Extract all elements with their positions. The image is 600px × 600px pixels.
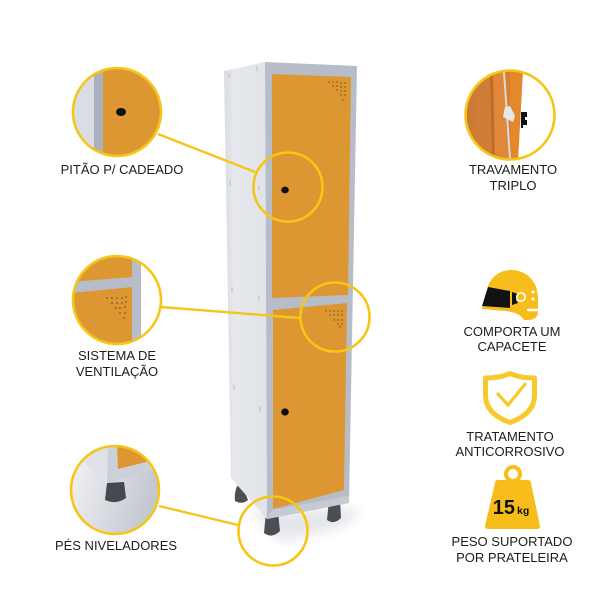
detail circle [465, 70, 555, 160]
detail circle [70, 445, 160, 535]
icon: helmet [482, 270, 539, 320]
label: PITÃO P/ CADEADO [61, 162, 183, 177]
leader line [161, 307, 300, 318]
upper vent holes [328, 81, 346, 101]
label: TRAVAMENTO [469, 162, 557, 177]
locker base strip [267, 496, 349, 519]
target circle [254, 152, 322, 222]
locker side [224, 62, 267, 519]
target circle [238, 496, 308, 566]
icon: shield [486, 374, 534, 422]
floor shadow [250, 508, 362, 542]
label: SISTEMA DE [78, 348, 156, 363]
side slots [228, 66, 261, 412]
target circle [300, 282, 370, 352]
locker feet [235, 486, 341, 536]
feature: travamento triplo [465, 70, 557, 193]
lower vent holes [325, 310, 343, 328]
label: TRATAMENTO [466, 429, 554, 444]
locker front frame [265, 62, 357, 519]
feature: comporta um capacete [463, 270, 561, 354]
leader line [158, 134, 255, 172]
callout: pitão [61, 65, 322, 222]
lower lock [281, 408, 289, 416]
label: CAPACETE [477, 339, 547, 354]
label: TRIPLO [490, 178, 536, 193]
leader line [159, 506, 238, 525]
detail circle [70, 65, 163, 160]
callout: ventilação [70, 255, 370, 379]
locker illustration [224, 62, 362, 542]
label: POR PRATELEIRA [456, 550, 568, 565]
lower door [273, 303, 347, 509]
label: ANTICORROSIVO [455, 444, 565, 459]
callout: pés [55, 445, 308, 566]
feature: tratamento anticorrosivo [455, 374, 565, 459]
weight value: 15kg [493, 497, 529, 519]
label: VENTILAÇÃO [76, 364, 158, 379]
upper door [272, 74, 351, 298]
upper lock [281, 187, 289, 193]
detail circle [70, 255, 165, 345]
label: COMPORTA UM [463, 324, 561, 339]
label: PÉS NIVELADORES [55, 538, 177, 553]
feature: peso suportado [452, 467, 572, 565]
label: PESO SUPORTADO [452, 534, 572, 549]
